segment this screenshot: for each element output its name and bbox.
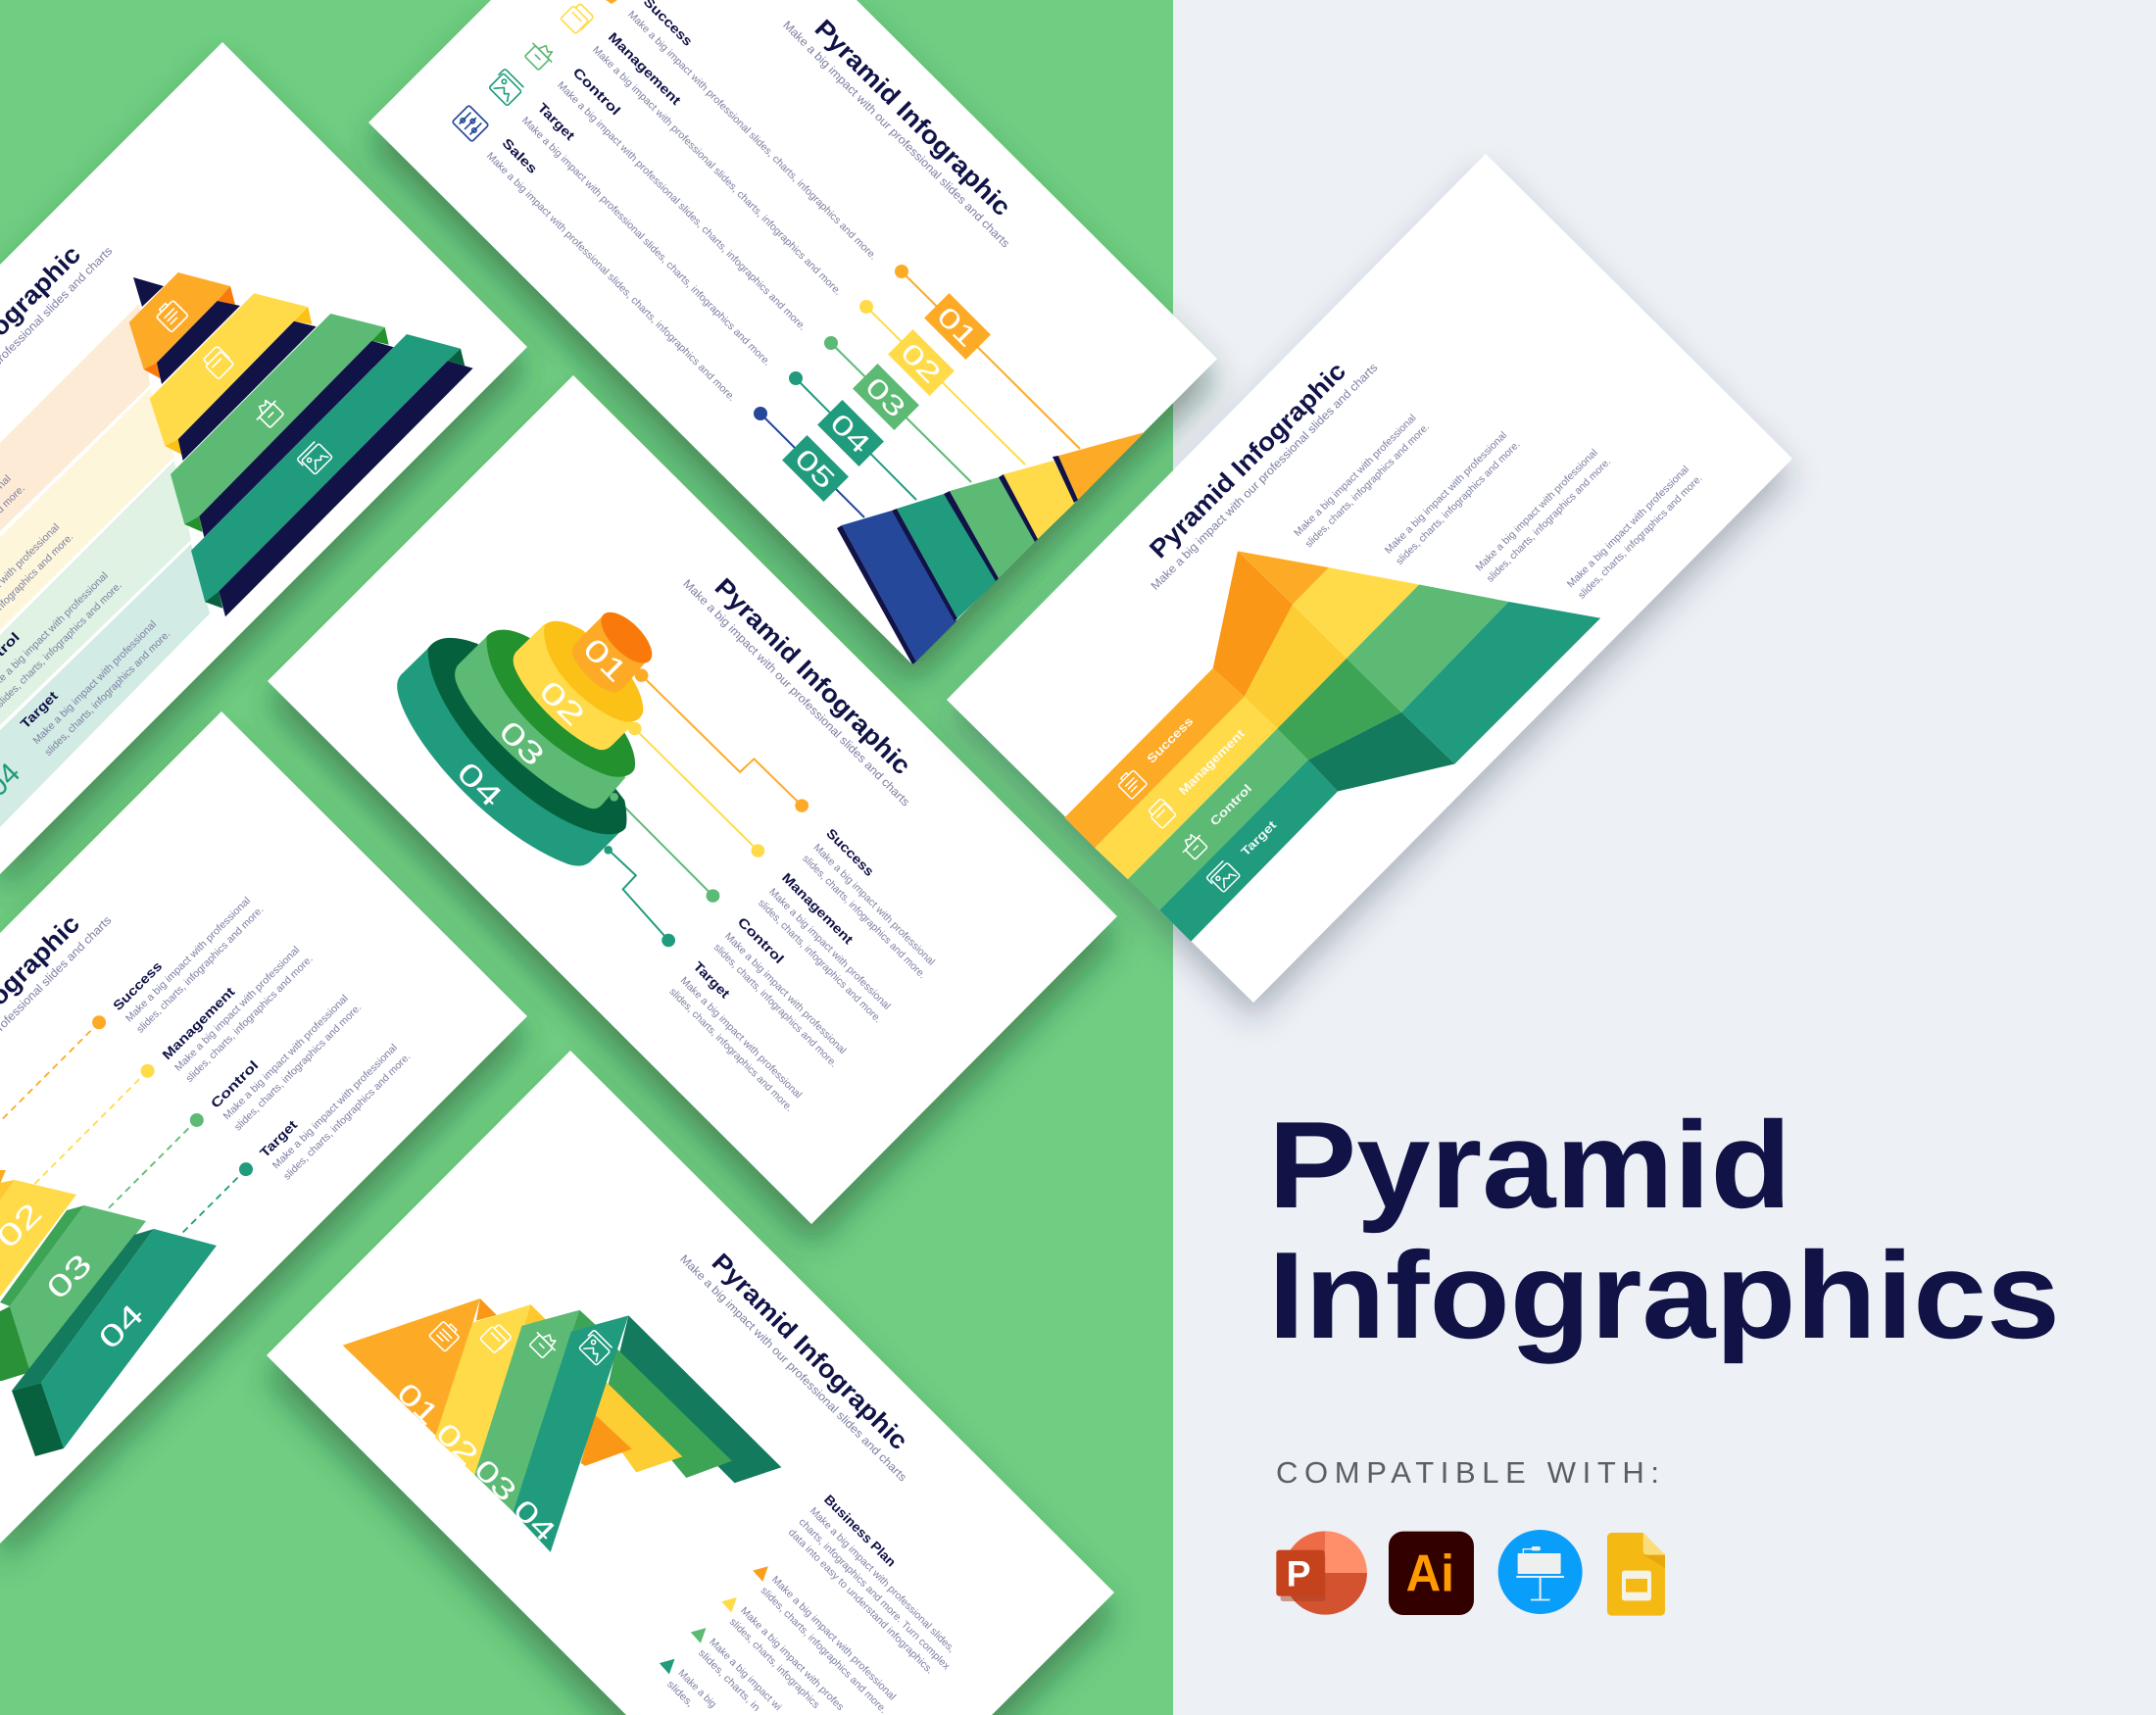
slide text: charts, infographics and more. Turn complex (797, 1516, 953, 1673)
icon: Google Slides (1607, 1533, 1665, 1616)
background: light panel (1173, 0, 2156, 1715)
slide text: slides, charts, infographics and more. (756, 897, 884, 1025)
tier numbers: 01 (576, 631, 634, 689)
panel: five-step slide, top centre (368, 0, 1217, 664)
triangle bullets (660, 1566, 768, 1674)
slide text: slides, charts, infographics and more. (1485, 456, 1613, 585)
folded ribbon pyramid (343, 1298, 781, 1552)
slide text: Make a big impact with professional (30, 618, 159, 747)
slide text (0, 221, 335, 805)
slide text: slides, charts, infographics and more. (183, 954, 316, 1085)
folded funnel chart (1064, 551, 1600, 942)
tiered cylinder pyramid (397, 604, 661, 866)
slide text: Pyramid Infographic (1144, 356, 1351, 564)
ribbon icons (429, 1319, 613, 1365)
app icons row (1276, 1530, 1665, 1616)
main heading: Infographics (1268, 1226, 2060, 1364)
slide text: Make a big impact with our professional slides and charts (1148, 361, 1380, 593)
folded funnel chart: Control (1207, 782, 1254, 829)
numbered tags (782, 293, 991, 502)
slide text: Make a big impact with professional (270, 1042, 400, 1171)
slide text: Make a big impact with professional (1473, 447, 1600, 573)
slide text: slides, charts, infographics and more. (1302, 421, 1432, 550)
folded funnel chart: Target (1239, 818, 1279, 858)
icon: PowerPoint (1276, 1531, 1367, 1615)
slide text: data into easy to understand infographics. (786, 1527, 936, 1677)
slide text: Sales (500, 135, 540, 176)
slide text: Make a big (675, 1667, 718, 1710)
panel: cylinder tier slide, centre (268, 375, 1117, 1224)
slide text (469, 555, 1029, 1114)
numbered tags: 05 (789, 443, 841, 495)
slide text: slides, charts, infographics and more. (281, 1051, 413, 1183)
slide text: slides, charts, infographics and more. (232, 1002, 364, 1133)
slide text: Target (18, 688, 61, 731)
slide text: Make a big impact with professional slides, charts, infographics and more. (555, 79, 808, 333)
slide text: Make a big impact with professional (172, 944, 302, 1074)
slide text: slides, charts, infographics and more. (134, 904, 267, 1036)
stepped pyramid chart (129, 272, 473, 616)
slide text: slides, charts, infographics and more. (800, 853, 928, 981)
funnel icons (1116, 768, 1241, 894)
background: green panel (0, 0, 1173, 1715)
slide text: slides, charts, infographics and more. (711, 942, 840, 1070)
connector lines (609, 668, 808, 947)
slide text (484, 0, 1035, 464)
main heading (1268, 1096, 2060, 1364)
slide text: Make a big impact with professional (1565, 464, 1691, 590)
slide text: Make a big impact with professional (221, 993, 351, 1122)
slide text: Make a big impact with professional slides, charts, infographics and more. (519, 115, 773, 368)
tier numbers: 02 (532, 673, 592, 733)
slide text: Target (691, 958, 733, 1002)
slide text: Success (110, 958, 165, 1013)
slide text: slides, charts, infographics (727, 1616, 822, 1711)
slide text: Make a big impact with professional (811, 842, 937, 968)
numbered tags: 01 (931, 301, 983, 353)
panel: stepped pyramid slide, top left (0, 42, 527, 874)
slide text (0, 809, 413, 1363)
stacked 3D pyramid (0, 1170, 217, 1456)
slide text: Control (735, 914, 787, 966)
slide text: Make a big impact with our professional slides and charts (680, 576, 912, 808)
slide text: Make a big impact with professional (678, 975, 804, 1101)
slide text: Make a big impact with professional slides, charts, infographics and more. (484, 150, 738, 404)
slide text: Management (160, 984, 238, 1062)
main heading: Pyramid (1268, 1096, 1791, 1234)
compatible with label: COMPATIBLE WITH: (1276, 1455, 1659, 1490)
slide text (664, 1248, 957, 1715)
tier numbers: 04 (450, 755, 510, 814)
stacked 3D pyramid: 04 (91, 1297, 151, 1356)
slide text: Business Plan (821, 1492, 899, 1570)
slide text: Make a big impact with our professional slides and charts (780, 18, 1012, 250)
slide text: Make a big impact with profes (738, 1605, 846, 1713)
icon: Illustrator: Ai (1406, 1544, 1454, 1602)
sliced pyramid (837, 432, 1145, 664)
tier numbers: 03 (492, 713, 552, 773)
pastel row bands (0, 304, 210, 827)
slide text: Control (570, 65, 623, 119)
slide text: slides, charts, in (696, 1647, 762, 1714)
numbered tags: 03 (859, 371, 911, 423)
ribbon numbers: 01 (390, 1377, 445, 1432)
slide text: slides, charts, infographics and more. (1394, 438, 1523, 567)
connector lines and dots (754, 265, 1080, 517)
panel: funnel slide, right (947, 154, 1792, 1003)
ribbon numbers: 02 (429, 1417, 484, 1472)
row icons (452, 0, 617, 142)
icon: picture (297, 440, 332, 476)
slide text: Management (779, 870, 857, 948)
slide text: Make a big impact with professional (1383, 429, 1509, 557)
icon: clipboard (154, 298, 188, 332)
slide text: Make a big impact with professional (769, 1574, 898, 1702)
slide text: Make a big impact with our professional slides and charts (677, 1251, 909, 1484)
slide text: Target (535, 100, 578, 143)
stacked 3D pyramid: 03 (39, 1247, 99, 1306)
icon: Keynote (1498, 1530, 1583, 1614)
numbered tags: 04 (824, 408, 876, 460)
slide text: Success (823, 826, 877, 879)
slide text: slides, charts, infographics and more. (666, 986, 795, 1114)
slide text: Make a big impact with professional slides, charts, infographics and more. (625, 9, 879, 263)
slide text (1126, 231, 1705, 810)
slide text: Make a big impact with professional (766, 886, 893, 1012)
slide text: Target (257, 1117, 301, 1160)
slide text: Pyramid Infographic (809, 14, 1017, 221)
slide text: slides, charts, infographics and more. (42, 628, 172, 759)
slide text: Make a big impact wi (707, 1637, 784, 1713)
slide text: Make a big impact with professional (123, 895, 253, 1024)
slide text: Pyramid Infographic (710, 572, 917, 780)
slide text: Pyramid Infographic (707, 1248, 914, 1455)
folded funnel chart: Management (1176, 727, 1248, 798)
slide text: Make a big impact with professional slides, (808, 1505, 957, 1655)
tier numbers (450, 631, 634, 814)
icon: basket (252, 396, 286, 430)
dashed connectors and dots (0, 1012, 256, 1291)
slide text: Control (208, 1057, 262, 1111)
ribbon numbers: 03 (467, 1453, 522, 1508)
folded funnel chart: Success (1145, 714, 1197, 766)
ribbon numbers (390, 1377, 562, 1548)
ribbon numbers: 04 (507, 1494, 562, 1548)
slide text: slides, charts, infographics and more. (1576, 472, 1705, 602)
slide text: Management (606, 29, 684, 108)
icon: Illustrator (1389, 1532, 1474, 1615)
icon: PowerPoint: P (1287, 1552, 1311, 1593)
slide text: slides, (664, 1679, 696, 1709)
icon: wallet (201, 346, 234, 379)
slide text: Make a big impact with professional (1292, 413, 1419, 539)
slide text: slides, charts, infographics and more. (759, 1585, 889, 1715)
slide text: Make a big impact with professional slides, charts, infographics and more. (590, 44, 844, 298)
panel: lollipop numbered slide, lower left (0, 711, 527, 1544)
numbered tags: 02 (895, 337, 947, 389)
slide text: Make a big impact with professional (722, 930, 849, 1056)
panel: folded pyramid slide, bottom centre (267, 1051, 1114, 1715)
